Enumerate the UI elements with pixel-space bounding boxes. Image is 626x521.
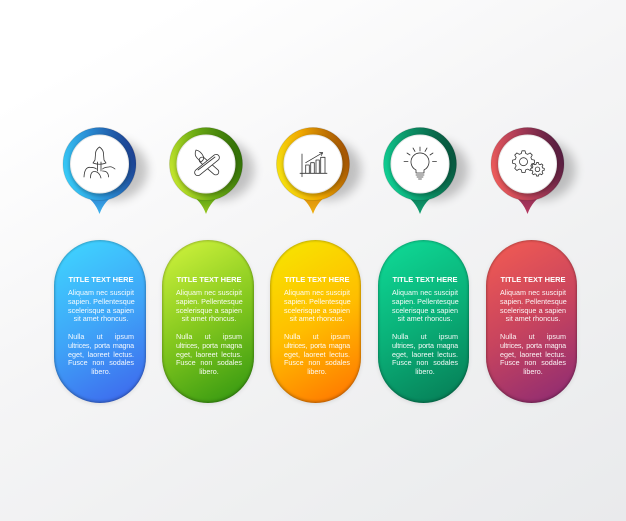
panel 3 paragraph 1: scelerisque a sapien [284,306,350,315]
panel 4 paragraph 1: scelerisque a sapien [392,306,458,315]
panel 3 paragraph 1: Aliquam nec suscipit [284,288,350,297]
panel 4 paragraph 2: eget, laoreet lectus. [392,350,458,359]
panel 2 paragraph 2: Fusce non sodales [176,358,242,367]
panel 1 heading: TITLE TEXT HERE [68,274,134,284]
panel 1 paragraph 1: scelerisque a sapien [68,306,134,315]
pin 5: red gears [491,128,576,214]
panel 2 paragraph 2: Nulla ut ipsum [176,332,242,341]
panel 3 paragraph 2: Fusce non sodales [284,358,350,367]
panel 1 paragraph 2: Nulla ut ipsum [68,332,134,341]
pin 3: yellow chart [276,128,361,214]
panel: green text pill [162,240,254,403]
panel 3 paragraph 2: libero. [307,367,327,376]
panel 5 paragraph 1: sit amet rhoncus. [506,314,560,323]
pin 1: blue rocket [63,128,148,214]
panel 4 paragraph 1: sapien. Pellentesque [392,297,459,306]
panel 3 paragraph 2 [284,332,350,376]
panel 2 heading: TITLE TEXT HERE [176,274,242,284]
panel: yellow text pill [270,240,361,403]
panel 4 paragraph 1: Aliquam nec suscipit [392,288,458,297]
panel: blue text pill [54,240,146,403]
panel: teal text pill [378,240,469,403]
panel 1 paragraph 2: Fusce non sodales [68,358,134,367]
panel 1 paragraph 1: sapien. Pellentesque [68,297,135,306]
panel 5 paragraph 2: libero. [523,367,543,376]
panel 4 heading: TITLE TEXT HERE [392,274,458,284]
panel 3 paragraph 2: ultrices, porta magna [284,341,350,350]
panel 4 paragraph 2: ultrices, porta magna [392,341,458,350]
panel 3 paragraph 2: eget, laoreet lectus. [284,350,350,359]
panel 2 paragraph 2: ultrices, porta magna [176,341,242,350]
panel 5 paragraph 1 [500,288,567,323]
pin 2: green tools [170,128,254,214]
panel 2 paragraph 1 [176,288,243,323]
panel 2 paragraph 1: sapien. Pellentesque [176,297,243,306]
panel 1 paragraph 1 [68,288,135,323]
panel 3 paragraph 1 [284,288,351,323]
panel 2 paragraph 1: Aliquam nec suscipit [176,288,242,297]
panel 5 paragraph 1: sapien. Pellentesque [500,297,567,306]
panel 4 paragraph 2: Nulla ut ipsum [392,332,458,341]
panel 3 paragraph 1: sapien. Pellentesque [284,297,351,306]
panel 4 paragraph 2 [392,332,458,376]
icon: crossed pencil and brush [193,150,221,177]
panel 1 paragraph 2: eget, laoreet lectus. [68,350,134,359]
icon: bar chart with arrow [300,152,327,177]
panel 5 paragraph 2: eget, laoreet lectus. [500,350,566,359]
panel 2 paragraph 2: eget, laoreet lectus. [176,350,242,359]
panel 4 paragraph 2: libero. [415,367,435,376]
icon: light bulb [404,147,436,179]
panel 1 paragraph 2: ultrices, porta magna [68,341,134,350]
panel 5 paragraph 1: scelerisque a sapien [500,306,566,315]
panel 1 paragraph 1: Aliquam nec suscipit [68,288,134,297]
panel 5 paragraph 1: Aliquam nec suscipit [500,288,566,297]
panel 3 paragraph 1: sit amet rhoncus. [290,314,344,323]
panel 5 paragraph 2: Nulla ut ipsum [500,332,566,341]
panel 4 paragraph 1: sit amet rhoncus. [398,314,452,323]
panel 4 paragraph 1 [392,288,459,323]
panel 1 paragraph 2 [68,332,134,376]
panel 3 paragraph 2: Nulla ut ipsum [284,332,350,341]
panel 5 paragraph 2: ultrices, porta magna [500,341,566,350]
panel 1 paragraph 2: libero. [91,367,111,376]
panel 5 paragraph 2 [500,332,566,376]
icon: gears [513,151,544,176]
panel 5 paragraph 2: Fusce non sodales [500,358,566,367]
panel 2 paragraph 1: scelerisque a sapien [176,306,242,315]
pin 4: teal bulb [384,128,468,214]
panel 4 paragraph 2: Fusce non sodales [392,358,458,367]
icon: rocket [84,147,115,178]
panel 1 paragraph 1: sit amet rhoncus. [74,314,128,323]
panel 5 heading: TITLE TEXT HERE [500,274,566,284]
panel: red text pill [486,240,577,403]
panel 3 heading: TITLE TEXT HERE [284,274,350,284]
panel 2 paragraph 2 [176,332,242,376]
panel 2 paragraph 2: libero. [199,367,219,376]
panel 2 paragraph 1: sit amet rhoncus. [182,314,236,323]
